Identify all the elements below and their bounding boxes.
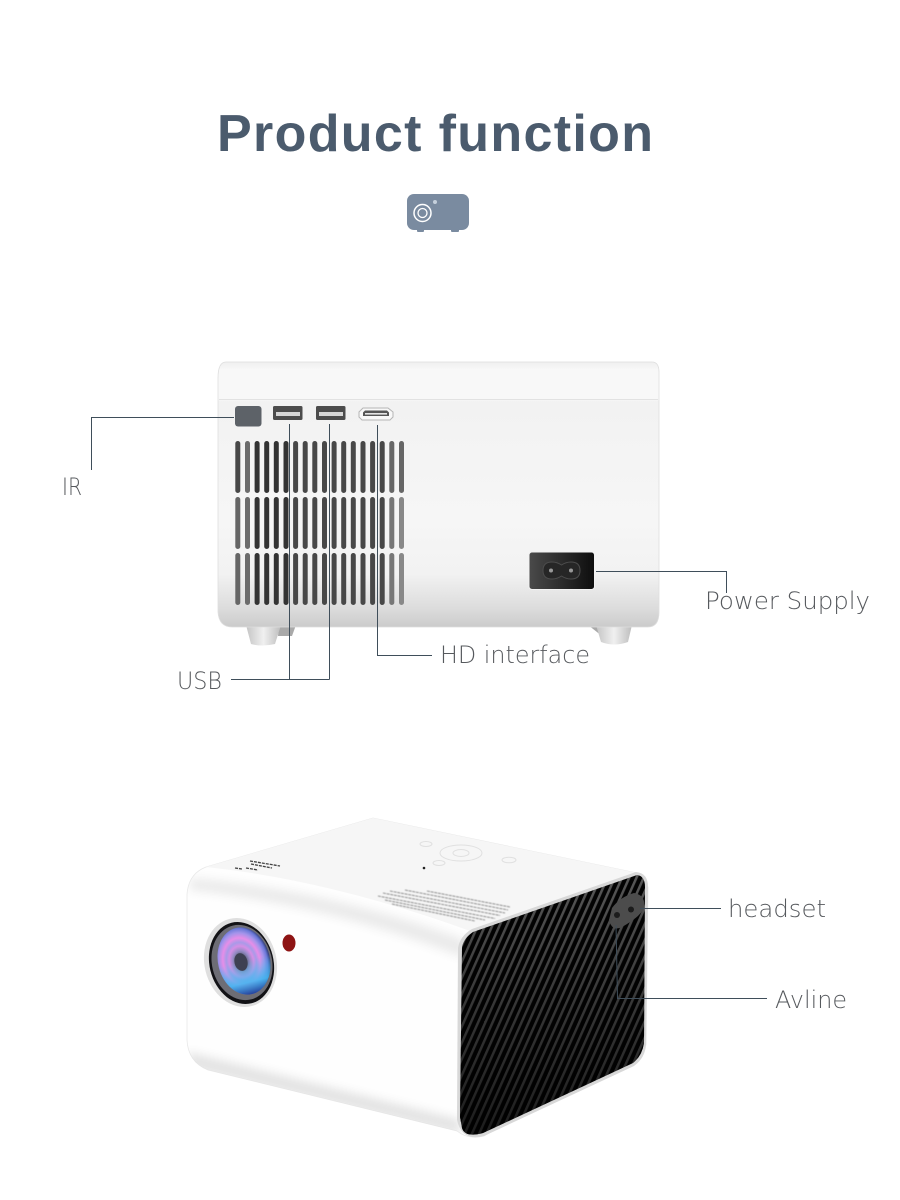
top face xyxy=(206,818,637,932)
USB port 1 xyxy=(273,406,302,420)
body silhouette xyxy=(187,818,648,1137)
callout: Power Supply xyxy=(596,572,870,615)
ventilation slots xyxy=(235,441,404,605)
side speaker panel xyxy=(450,865,650,1145)
projector front view xyxy=(187,818,650,1145)
callout: IR: IR xyxy=(62,473,82,501)
callout: USB xyxy=(177,424,330,695)
icon: projector xyxy=(407,194,469,232)
callout: IR xyxy=(62,418,234,501)
callout: Avline xyxy=(616,925,847,1014)
callout: Power Supply: Power Supply xyxy=(705,587,870,615)
IR window xyxy=(235,406,262,426)
side AV jacks xyxy=(609,893,644,928)
red sensor dot xyxy=(282,934,296,952)
soft edge shading xyxy=(187,878,465,1134)
rear feet xyxy=(246,625,632,646)
power socket xyxy=(529,552,594,590)
control buttons xyxy=(420,842,516,866)
lens xyxy=(195,910,286,1015)
rear body xyxy=(218,362,659,627)
callout: headset: headset xyxy=(728,895,826,923)
callout: HD interface xyxy=(378,425,590,669)
HD port xyxy=(359,408,393,420)
printed spec lines xyxy=(378,890,510,921)
rear seam line xyxy=(219,398,658,400)
infographic canvas xyxy=(64,114,869,1138)
printed corner marks xyxy=(235,861,280,870)
projector rear view xyxy=(218,362,659,646)
indicator dot xyxy=(423,867,425,869)
callout: USB: USB xyxy=(177,667,222,695)
callout: Avline: Avline xyxy=(775,986,847,1014)
callout: HD interface: HD interface xyxy=(440,641,590,669)
title: Product function xyxy=(217,105,653,163)
USB port 2 xyxy=(316,406,346,420)
